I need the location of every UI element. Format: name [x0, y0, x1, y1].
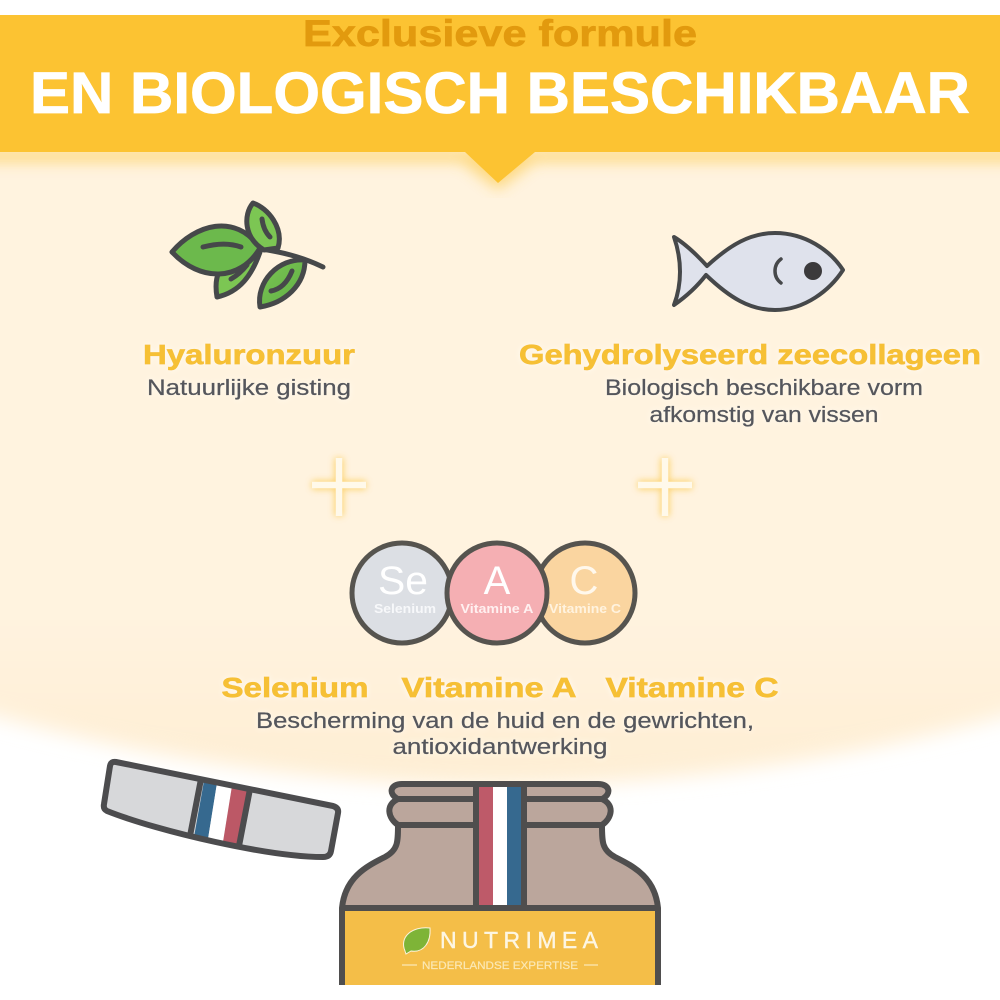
- circle: vitamine A: A: [484, 559, 511, 603]
- banner: [0, 13, 1000, 190]
- circle: vitamine C: Vitamine C: [549, 602, 621, 616]
- ingredient: hyaluronzuur: Natuurlijke gisting: [147, 375, 351, 400]
- cream background: [0, 130, 1000, 785]
- ingredient: hyaluronzuur: [143, 339, 355, 400]
- ingredient: zeecollageen: Gehydrolyseerd zeecollageen: [519, 339, 981, 370]
- nutrient labels: Vitamine A: [402, 672, 576, 703]
- jar outline: [342, 784, 658, 985]
- subtitle: Exclusieve formule: [303, 13, 697, 54]
- jar lid: [104, 762, 338, 857]
- description: antioxidantwerking: [392, 734, 608, 759]
- icon: leaves: [172, 203, 323, 307]
- icon: fish: [674, 233, 843, 310]
- circle: vitamine A: Vitamine A: [460, 602, 534, 616]
- flag stripe: [473, 784, 527, 908]
- circle: selenium: Se: [378, 559, 428, 603]
- icon: leaf logo: [404, 928, 430, 954]
- ingredient: zeecollageen: afkomstig van vissen: [650, 402, 878, 427]
- tagline: NEDERLANDSE EXPERTISE: [422, 960, 578, 972]
- ingredient: zeecollageen: Biologisch beschikbare vorm: [605, 375, 923, 400]
- circle: selenium: [352, 543, 452, 643]
- title: EN BIOLOGISCH BESCHIKBAAR: [30, 61, 970, 126]
- nutrient labels: Vitamine C: [606, 672, 778, 703]
- ingredient: zeecollageen: [519, 339, 981, 427]
- nutrient labels: Selenium: [222, 672, 368, 703]
- plus icon right: [638, 458, 692, 516]
- description: [256, 708, 754, 759]
- plus icon left: [312, 458, 366, 516]
- circle: selenium: Selenium: [374, 602, 436, 616]
- nutrient circles: [352, 543, 635, 643]
- circle: vitamine A: [447, 543, 547, 643]
- brand: NUTRIMEA: [440, 927, 599, 953]
- circle: vitamine C: C: [570, 559, 598, 603]
- description: Bescherming van de huid en de gewrichten,: [256, 708, 754, 733]
- ingredient: hyaluronzuur: Hyaluronzuur: [143, 339, 355, 370]
- jar: [342, 784, 658, 985]
- nutrient labels: [222, 672, 778, 703]
- circle: vitamine C: [535, 543, 635, 643]
- jar label: [345, 911, 655, 985]
